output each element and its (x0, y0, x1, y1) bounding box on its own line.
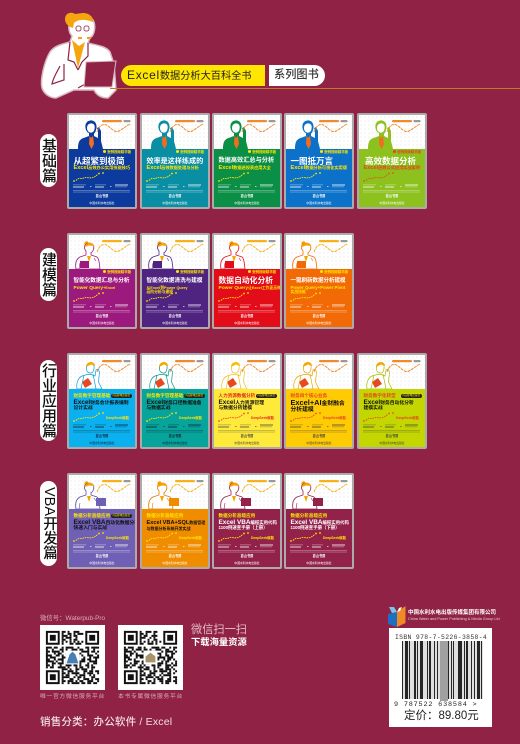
cover (214, 389, 280, 447)
cover: 靠山书屋 (241, 314, 253, 318)
cover: 人民邮电出版社 (402, 394, 420, 397)
cover: 人民邮电出版社 (185, 394, 203, 397)
cover: 与数据实战 (146, 406, 170, 411)
cover: DeepSeek赋能 (251, 416, 274, 420)
cover: 中国水利水电出版社 (89, 320, 115, 324)
cover (359, 149, 425, 207)
cover: Excel VBA编程实用代码 (218, 519, 277, 526)
cover: 靠山书屋 (96, 434, 108, 438)
cover: 靠山书屋 (386, 194, 398, 198)
section label: 建模篇: 建模篇 (40, 252, 57, 297)
cover: 靠山书屋 (96, 194, 108, 198)
book: 效率是这样练成的 (140, 113, 210, 209)
cover: 靠山书屋 (241, 554, 253, 558)
cover: 高阶分析与建模 (146, 290, 173, 294)
cover: Excel数据分析可视化实用版 (290, 165, 347, 171)
cover: 快速入门与实战 (74, 526, 107, 531)
cover: Excel VBA编程实用代码 (290, 519, 349, 526)
cover: 智能化数据汇总与分析 (74, 278, 129, 284)
book: 一键刷新数据分析建模 (284, 233, 354, 329)
book: Excel VBA编程实用代码（下册） (284, 473, 354, 569)
barcode block (389, 628, 492, 727)
cover: 中国水利水电出版社 (306, 440, 332, 444)
cover (359, 389, 425, 447)
download prompt: 下载海量资源 (191, 637, 247, 647)
cover (286, 269, 352, 327)
cover: 一图抵万言 (290, 156, 333, 166)
cover (214, 149, 280, 207)
cover: 靠山书屋 (169, 554, 181, 558)
section label: 行业应用篇: 行业应用篇 (40, 363, 57, 438)
book: 智能化数据清洗与建模 (140, 233, 210, 329)
cover: Excel高效办公实用技能技巧 (74, 165, 130, 171)
cover: 靠山书屋 (96, 554, 108, 558)
cover: Excel数据透视表应用大全 (218, 165, 271, 171)
cover (69, 509, 135, 567)
publisher logo (388, 606, 406, 627)
cover: 数据分析高级应用 (218, 513, 255, 518)
cover: 案例视频精华版 (324, 150, 348, 154)
cover: 人民邮电出版社 (112, 514, 130, 517)
header rule (110, 88, 520, 89)
QR caption 2: 本书专属微信服务平台 (118, 694, 183, 700)
cover: 与数据分析建模 (218, 406, 252, 411)
cover: DeepSeek赋能 (179, 536, 202, 540)
book: Excel VBA+SQL数据管理 (140, 473, 210, 569)
heading: series name (121, 65, 265, 86)
cover: DeepSeek赋能 (396, 416, 419, 420)
WeChat id: 微信号：Waterpub-Pro (40, 615, 105, 622)
section label: VBA开发篇: VBA开发篇 (41, 487, 57, 560)
cover: 与数据分析系统开发实战 (146, 526, 190, 531)
heading: series label (269, 65, 325, 86)
cover: Power Query+Power Pivot (290, 285, 345, 290)
book: 智能化数据汇总与分析 (67, 233, 137, 329)
book: Excel财务自动化分析 (357, 353, 427, 449)
heading: series name: Excel数据分析大百科全书 (127, 68, 252, 82)
cover: 靠山书屋 (96, 314, 108, 318)
cover: Excel财务会计报表编制 (74, 399, 129, 406)
book: Excel财务口径数据准备 (140, 353, 210, 449)
cover: 中国水利水电出版社 (234, 320, 260, 324)
cover: 分析建模 (290, 407, 314, 413)
cover: 中国水利水电出版社 (306, 320, 332, 324)
book: 数据高效汇总与分析 (212, 113, 282, 209)
cover: Excel VBA+SQL数据管理 (146, 520, 205, 526)
cover: Excel财务口径数据准备 (146, 399, 202, 406)
cover (286, 389, 352, 447)
cover (286, 509, 352, 567)
cover: Power Query+Excel (74, 286, 115, 291)
price: 定价：89.80元 (404, 710, 479, 722)
cover (214, 509, 280, 567)
QR code: book service platform (118, 625, 183, 690)
scan prompt: 微信扫一扫 (191, 624, 247, 636)
cover: 一键刷新数据分析建模 (290, 278, 346, 284)
cover: 从Excel到Power Query (146, 286, 187, 290)
cover: 人民邮电出版社 (257, 394, 275, 397)
cover: 1100例速查手册（上册） (218, 525, 268, 530)
cover: 中国水利水电出版社 (162, 560, 188, 564)
cover (142, 149, 208, 207)
cover: DeepSeek赋能 (106, 416, 129, 420)
cover: 靠山书屋 (313, 194, 325, 198)
cover: 1100例速查手册（下册） (290, 525, 340, 530)
cover: DeepSeek赋能 (323, 416, 346, 420)
book: Excel人力资源管理 (212, 353, 282, 449)
cover: 数据分析高级应用 (74, 513, 110, 518)
cover: 从超繁到极简 (74, 156, 125, 166)
cover: 中国水利水电出版社 (379, 440, 405, 444)
cover (142, 389, 208, 447)
cover: 财务数字管理基础 (74, 393, 110, 398)
cover: DeepSeek赋能 (251, 536, 274, 540)
cover: 中国水利水电出版社 (162, 200, 188, 204)
cover: 中国水利水电出版社 (306, 560, 332, 564)
book: 从超繁到极简 (67, 113, 137, 209)
cover (142, 269, 208, 327)
cover: 中国水利水电出版社 (89, 440, 115, 444)
cover: 案例视频精华版 (180, 270, 204, 274)
book: Excel VBA编程实用代码（上册） (212, 473, 282, 569)
cover: 智能化数据清洗与建模 (146, 278, 202, 284)
cover: 案例视频精华版 (180, 150, 204, 154)
illustration: woman holding laptop (40, 12, 117, 99)
cover: Excel财务自动化分析 (364, 399, 414, 406)
cover: 数据高效汇总与分析 (218, 157, 274, 164)
cover: 财务四个核心业务 (290, 393, 327, 398)
section label: 基础篇: 基础篇 (40, 138, 57, 183)
cover: 案例视频精华版 (324, 270, 348, 274)
cover: 靠山书屋 (169, 194, 181, 198)
cover: 中国水利水电出版社 (89, 200, 115, 204)
QR code: official platform (40, 625, 105, 690)
cover: 中国水利水电出版社 (306, 200, 332, 204)
book: 一图抵万言 (284, 113, 354, 209)
cover: 案例视频精华版 (397, 150, 421, 154)
cover: 中国水利水电出版社 (234, 560, 260, 564)
cover: 案例视频精华版 (107, 270, 131, 274)
cover: DeepSeek赋能 (323, 536, 346, 540)
cover (214, 269, 280, 327)
cover: 中国水利水电出版社 (234, 440, 260, 444)
barcode digits: 9 787522 638584 > (394, 701, 477, 709)
cover: 靠山书屋 (313, 314, 325, 318)
cover: 靠山书屋 (241, 434, 253, 438)
cover: 靠山书屋 (313, 554, 325, 558)
cover: 案例视频精华版 (252, 270, 276, 274)
book: Excel VBA自动化数据分析 (67, 473, 137, 569)
cover: 建模实战 (364, 406, 383, 411)
book: 数据自动化分析 (212, 233, 282, 329)
cover: 靠山书屋 (386, 434, 398, 438)
cover: 中国水利水电出版社 (162, 440, 188, 444)
cover: Power Query让Excel工作更高效 (218, 286, 281, 291)
cover: 人民邮电出版社 (112, 394, 130, 397)
cover: 案例视频精华版 (252, 150, 276, 154)
cover: Excel高效数据处理与分析 (146, 165, 199, 171)
cover: 人力资源数据分析 (218, 393, 255, 398)
publisher English name: China Water and Power Publishing & Media Group Ltd (408, 617, 500, 621)
cover: 案例视频精华版 (107, 150, 131, 154)
publisher name (408, 608, 500, 621)
cover (69, 389, 135, 447)
cover: 靠山书屋 (241, 194, 253, 198)
cover: DeepSeek赋能 (106, 536, 129, 540)
cover: Excel函数公式应用实战案例 (364, 165, 420, 171)
cover (69, 149, 135, 207)
cover: 中国水利水电出版社 (162, 320, 188, 324)
cover: 中国水利水电出版社 (234, 200, 260, 204)
QR caption 1: 唯一官方微信服务平台 (40, 694, 105, 700)
cover (286, 149, 352, 207)
cover: 设计实战 (74, 406, 93, 411)
cover: 效率是这样练成的 (146, 157, 203, 165)
book: Excel财务会计报表编制 (67, 353, 137, 449)
cover: 中国水利水电出版社 (89, 560, 115, 564)
book: Excel+AI金财融合 (284, 353, 354, 449)
cover: 数据分析高级应用 (146, 513, 183, 518)
book: 高效数据分析 (357, 113, 427, 209)
cover: 财务数字化转型 (364, 393, 396, 398)
cover: 中国水利水电出版社 (379, 200, 405, 204)
cover (142, 509, 208, 567)
ISBN number: ISBN 978-7-5226-3858-4 (395, 634, 487, 641)
cover (69, 269, 135, 327)
cover: 靠山书屋 (169, 314, 181, 318)
cover: 财务数字管理基础 (146, 393, 183, 398)
sales category: 销售分类：办公软件 / Excel (40, 716, 172, 728)
cover: 数据自动化分析 (218, 276, 273, 285)
cover: 靠山书屋 (169, 434, 181, 438)
cover: DeepSeek赋能 (179, 416, 202, 420)
heading: series label: 系列图书 (274, 69, 319, 81)
barcode (402, 641, 483, 701)
cover: 实战技能 (290, 290, 306, 294)
publisher Chinese name: 中国水利水电出版传媒集团有限公司 (408, 610, 496, 616)
cover: Excel+AI金财融合 (290, 398, 345, 407)
cover: 高效数据分析 (365, 156, 416, 166)
cover: 靠山书屋 (313, 434, 325, 438)
cover: Excel人力资源管理 (218, 399, 264, 406)
cover: 数据分析高级应用 (290, 513, 327, 518)
